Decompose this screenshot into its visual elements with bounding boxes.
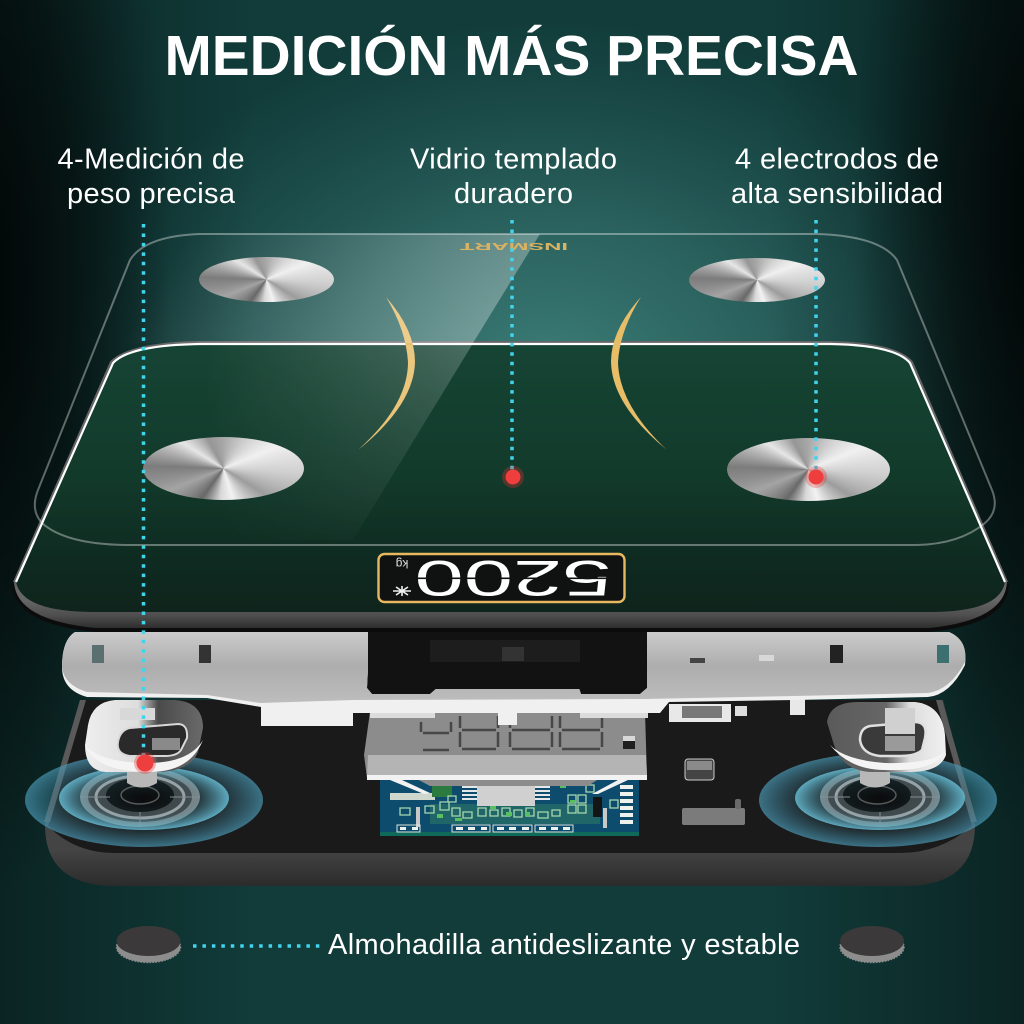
metal frame bbox=[62, 632, 965, 726]
dotted leader: tempered glass bbox=[510, 220, 514, 472]
glass reflection, upper bbox=[164, 234, 540, 343]
label: weight measurement bbox=[58, 144, 244, 210]
dotted leader: weight measurement bbox=[142, 224, 145, 758]
plate top highlight edge bbox=[16, 344, 1005, 582]
marker: electrode bbox=[805, 466, 827, 488]
plate rim highlight bbox=[14, 582, 1007, 628]
left load sensor bbox=[80, 767, 200, 827]
right sensor post bbox=[860, 768, 890, 788]
gold crescent right bbox=[611, 297, 667, 450]
label: weight measurement: 4-Medición de bbox=[58, 144, 244, 176]
right foot pad bbox=[840, 926, 904, 962]
electrode: top left bbox=[199, 257, 334, 302]
label: electrodes bbox=[731, 144, 943, 210]
label: non-slip pads: Almohadilla antideslizante y estable bbox=[328, 929, 800, 961]
title: MEDICIÓN MÁS PRECISA bbox=[164, 24, 858, 88]
electrode: bottom left bbox=[143, 437, 304, 500]
unit: kg bbox=[396, 557, 408, 571]
scale base body bbox=[44, 700, 977, 886]
icon: bluetooth bbox=[393, 586, 411, 596]
right bracket pad bbox=[827, 702, 946, 772]
circuit board bbox=[380, 778, 639, 836]
marker: sensor bbox=[134, 752, 156, 774]
left signal rings bbox=[25, 753, 263, 847]
electrode: top right bbox=[689, 258, 825, 302]
marker: glass bbox=[502, 466, 524, 488]
label: electrodes: 4 electrodos de bbox=[735, 144, 939, 176]
glass reflection, lower bbox=[246, 345, 472, 512]
small sensor component bbox=[685, 759, 714, 780]
green glass plate bbox=[16, 344, 1005, 612]
micro USB connector bbox=[669, 698, 805, 722]
plate side shadow edge bbox=[14, 342, 1007, 582]
plate edge rim bbox=[12, 584, 1009, 632]
LED display bbox=[378, 550, 624, 606]
dotted leader: pads bbox=[193, 944, 321, 948]
gold crescent left bbox=[358, 297, 415, 450]
left bracket pad bbox=[85, 700, 203, 772]
weight reading: 5200 bbox=[414, 550, 612, 606]
display bracket bbox=[364, 712, 648, 794]
electrode: bottom right bbox=[727, 438, 890, 501]
dotted leader: electrodes bbox=[814, 220, 818, 472]
label: electrodes: alta sensibilidad bbox=[731, 178, 943, 210]
label: tempered glass: Vidrio templado bbox=[410, 144, 617, 176]
label: tempered glass bbox=[410, 144, 617, 210]
left foot pad bbox=[116, 926, 180, 962]
upper glass outline bbox=[35, 234, 995, 545]
brand mark: INSMART bbox=[459, 240, 568, 252]
battery contact block bbox=[682, 799, 745, 825]
left sensor post bbox=[127, 768, 157, 788]
right signal rings bbox=[759, 753, 997, 847]
label: tempered glass: duradero bbox=[454, 178, 573, 210]
right load sensor bbox=[820, 767, 940, 827]
label: weight measurement: peso precisa bbox=[67, 178, 236, 210]
